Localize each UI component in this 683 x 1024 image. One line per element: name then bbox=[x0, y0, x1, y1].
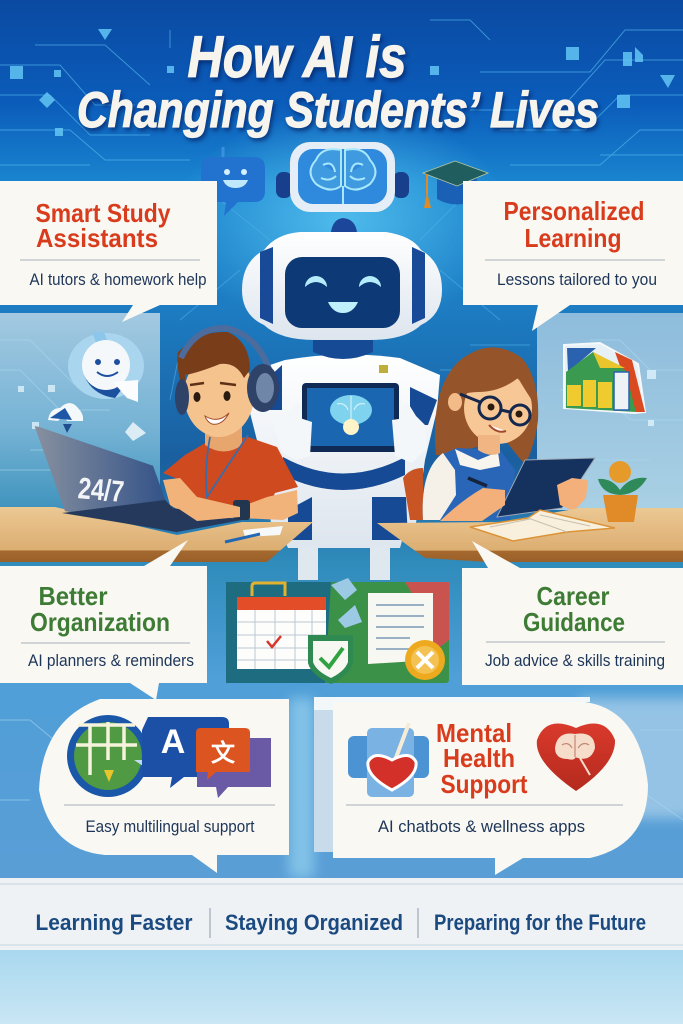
girl eyes and mouth bbox=[488, 404, 522, 432]
icon: arrow bbox=[125, 422, 146, 441]
calendar bbox=[237, 583, 326, 669]
pen bbox=[468, 478, 487, 486]
footer phrases bbox=[36, 910, 646, 935]
title: How AI is bbox=[188, 25, 406, 90]
icon: cloud bbox=[48, 403, 83, 433]
heading: personalized learning: Personalized bbox=[504, 196, 644, 226]
heading: smart study assistants bbox=[36, 198, 171, 253]
caption: smart study: AI tutors & homework help bbox=[30, 270, 206, 289]
caption: multilingual: Easy multilingual support bbox=[86, 817, 255, 836]
boy shirt bbox=[163, 437, 298, 515]
boy lanyard bbox=[206, 435, 248, 497]
calendar and checklist graphic bbox=[226, 578, 449, 684]
girl clothes bbox=[423, 448, 515, 520]
heading: career guidance: Career bbox=[536, 581, 610, 611]
heading: career guidance bbox=[523, 581, 625, 637]
laptop: 24/7 bbox=[77, 472, 125, 509]
laptop bbox=[35, 426, 242, 532]
girl fringe bbox=[462, 358, 535, 405]
robot neck bbox=[313, 340, 373, 359]
x badge bbox=[405, 640, 445, 680]
icon: brain visor bbox=[276, 142, 409, 212]
icon: heart with brain bbox=[537, 724, 615, 791]
robot bbox=[242, 218, 442, 580]
icon: potted plant bbox=[598, 461, 647, 522]
pen and note bbox=[225, 526, 283, 542]
icon: smiling chat bbox=[68, 332, 144, 402]
heading: personalized learning bbox=[504, 196, 644, 253]
robot legs bbox=[298, 545, 390, 580]
title: Changing Students’ Lives bbox=[77, 82, 599, 138]
title bbox=[77, 25, 599, 138]
heading: better organization: Organization bbox=[30, 607, 170, 637]
footer banner bbox=[0, 878, 683, 950]
boy hands on keyboard bbox=[167, 492, 240, 521]
caption: personalized: Lessons tailored to you bbox=[497, 270, 657, 289]
heading: career guidance: Guidance bbox=[523, 607, 625, 637]
panel: career guidance bbox=[462, 541, 683, 685]
footer phrases: Preparing for the Future bbox=[434, 910, 646, 935]
boy headphones bbox=[175, 328, 279, 415]
caption: better organization: AI planners & reminders bbox=[28, 651, 194, 670]
girl bbox=[403, 347, 595, 521]
panel: multilingual support bbox=[39, 699, 289, 873]
heading: smart study assistants: Smart Study bbox=[36, 198, 171, 228]
shield bbox=[308, 635, 353, 684]
icon: globe and translate bubbles: A bbox=[161, 723, 185, 761]
panel: personalized learning bbox=[463, 181, 683, 331]
heading: mental health support bbox=[436, 718, 528, 799]
boy watch bbox=[233, 500, 250, 520]
caption: career guidance: Job advice & skills training bbox=[485, 651, 665, 670]
checklist paper bbox=[368, 593, 433, 664]
panel: smart study assistants bbox=[0, 181, 217, 322]
footer phrases: Staying Organized bbox=[225, 910, 403, 935]
caption: mental health: AI chatbots & wellness apps bbox=[378, 817, 585, 836]
boy arms bbox=[163, 478, 298, 521]
icon: heart tablet bbox=[348, 723, 429, 797]
heading: smart study assistants: Assistants bbox=[36, 223, 158, 253]
heading: personalized learning: Learning bbox=[524, 223, 622, 253]
desk right bbox=[377, 508, 683, 562]
girl face bbox=[464, 372, 532, 444]
boy neck and face bbox=[205, 425, 242, 452]
robot badge bbox=[379, 365, 388, 373]
icon: bar chart bbox=[564, 343, 645, 413]
boy hair bbox=[177, 332, 250, 380]
heading: better organization: Better bbox=[38, 581, 108, 611]
icon: globe and translate bubbles bbox=[67, 715, 271, 798]
heading: mental health support: Health bbox=[443, 743, 515, 773]
robot head bbox=[242, 218, 442, 340]
open book bbox=[470, 510, 615, 541]
chair bbox=[403, 468, 423, 520]
heading: mental health support: Support bbox=[440, 769, 528, 799]
girl hair bbox=[435, 347, 538, 465]
boy face details bbox=[190, 383, 236, 424]
robot tablet bbox=[302, 383, 399, 452]
heading: mental health support: Mental bbox=[436, 718, 512, 748]
panel: mental health support bbox=[314, 697, 648, 875]
girl hands bbox=[440, 478, 588, 521]
icon: chat bubble bbox=[201, 147, 265, 216]
heading: better organization bbox=[30, 581, 170, 637]
robot arm bands bbox=[266, 365, 437, 540]
boy bbox=[163, 328, 298, 521]
icon: graduation cap bbox=[423, 161, 488, 208]
panel: better organization bbox=[0, 540, 207, 700]
icon: globe and translate bubbles: 文 bbox=[211, 739, 236, 767]
footer phrases: Learning Faster bbox=[36, 910, 193, 935]
robot hands bbox=[272, 403, 312, 460]
tablet bbox=[497, 458, 595, 517]
desk left bbox=[0, 507, 313, 562]
girl glasses bbox=[460, 394, 530, 425]
footer strip bbox=[0, 950, 683, 1024]
robot body bbox=[248, 354, 440, 548]
